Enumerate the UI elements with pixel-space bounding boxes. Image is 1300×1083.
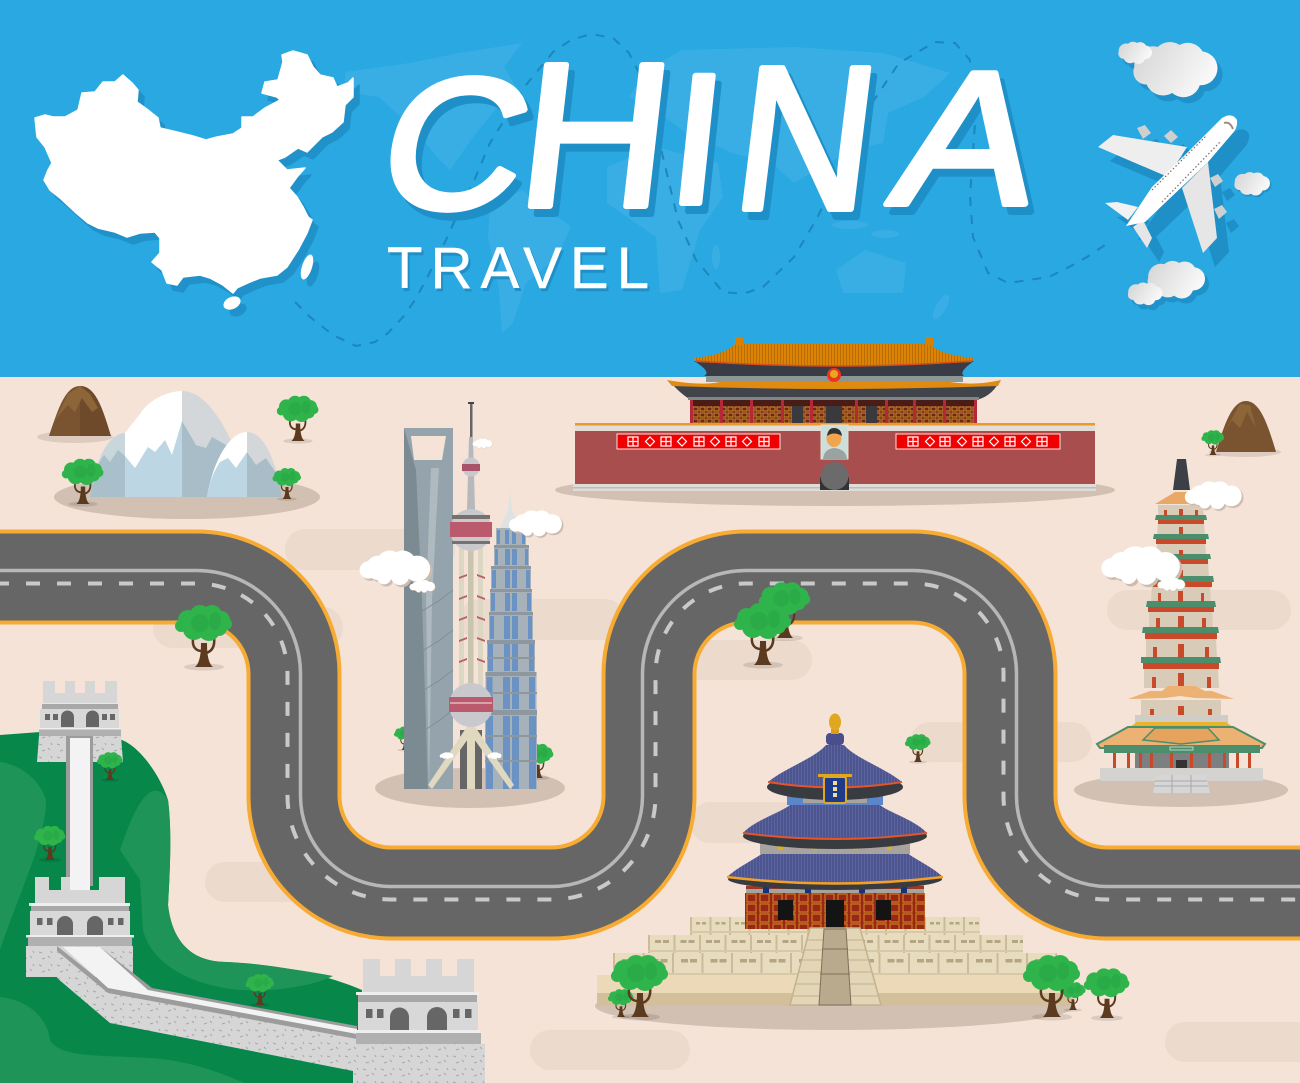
tower 1 [37, 681, 123, 762]
finial [1173, 459, 1190, 490]
Tiananmen gate [555, 337, 1115, 506]
title: CHINA [365, 21, 1062, 253]
tower 3 [353, 959, 485, 1083]
right brown hill [1201, 401, 1281, 457]
Great Wall [26, 681, 485, 1083]
sky clouds and airplane [1098, 42, 1270, 305]
cloud: bottom pair [1128, 261, 1205, 305]
temple trees [608, 955, 1129, 1021]
mid roof [1128, 686, 1234, 699]
Shanghai skyline [360, 402, 565, 808]
plaque [818, 774, 852, 803]
wall [575, 423, 1095, 426]
top roof [767, 774, 903, 800]
diagonal wall run [57, 946, 357, 1071]
vertical wall run [66, 736, 93, 886]
title: CHINA: H [509, 21, 683, 250]
tower leg clouds [440, 752, 501, 759]
hall lower [745, 893, 925, 929]
title: CHINA: I [661, 36, 734, 243]
mountains group [37, 386, 320, 519]
tree on road bend [175, 605, 232, 670]
airplane [1098, 115, 1237, 253]
green beam [1104, 745, 1260, 753]
cloud: top large [1118, 42, 1218, 97]
shadow [375, 768, 565, 808]
title: CHINA: N [724, 24, 889, 253]
bottom roof [728, 868, 942, 890]
top roof [1155, 492, 1200, 504]
cloud on pearl [473, 439, 492, 448]
lone tree top [277, 396, 318, 444]
subtitle: TRAVEL: TRAVEL [387, 236, 649, 301]
gate pavilion columns [690, 400, 977, 423]
Jin Mao tower [485, 490, 537, 789]
Temple of Heaven [595, 714, 1129, 1030]
ground shadow [54, 475, 320, 519]
road surface [0, 577, 1300, 893]
cloud: right small [1234, 172, 1270, 196]
tower 2 [26, 877, 134, 977]
tree near temple [905, 734, 931, 764]
sand ground [0, 377, 1300, 1083]
pagoda clouds [1101, 481, 1242, 591]
middle roof [743, 823, 927, 849]
cloud left of tower [360, 551, 430, 585]
central arch door [820, 462, 849, 490]
portrait [821, 425, 848, 459]
red banner left [617, 434, 780, 449]
road edge [0, 577, 1300, 893]
lower roof [672, 384, 998, 400]
dashed flight route [295, 34, 1105, 346]
shadow [595, 982, 1075, 1030]
World Financial Center [404, 428, 453, 789]
red banner right [896, 434, 1060, 449]
title: CHINA: A [877, 32, 1062, 244]
shadow [555, 474, 1115, 506]
island: Hainan [221, 294, 243, 312]
tower body [1141, 505, 1221, 716]
balustrades [613, 953, 1057, 975]
solid lane line [0, 570, 1300, 886]
small trees behind towers [394, 726, 416, 751]
balustrade [1135, 715, 1228, 723]
upper roof [694, 361, 974, 376]
finial [826, 714, 844, 745]
world map backdrop [345, 43, 952, 333]
base and steps [1100, 768, 1263, 781]
big roof [1097, 727, 1265, 748]
background soft pills [153, 529, 1300, 1070]
Pagoda [1074, 459, 1288, 807]
title: CHINA: C [365, 40, 547, 248]
snowy peaks [90, 433, 125, 497]
Oriental Pearl tower [428, 402, 514, 789]
platform base [597, 975, 1073, 993]
arched windows [1150, 509, 1212, 716]
middle drum [760, 838, 910, 854]
map of China [35, 51, 353, 312]
great wall trees [34, 752, 274, 1007]
mountain trees [62, 459, 103, 507]
upper drum [787, 794, 883, 805]
dashed lane line [0, 584, 1300, 900]
road [0, 570, 1300, 900]
tree by hill [1201, 430, 1224, 456]
brown hill [49, 386, 111, 436]
hall [1135, 753, 1229, 769]
grand stairway [790, 928, 881, 1005]
eaves [1141, 515, 1221, 663]
trees in road loop [734, 582, 810, 668]
shadow [1074, 773, 1288, 807]
island: Taiwan [298, 253, 316, 281]
green hill [0, 732, 362, 1083]
national emblem [827, 368, 841, 382]
sky panel [0, 0, 1300, 377]
cloud right of tower [509, 510, 562, 536]
